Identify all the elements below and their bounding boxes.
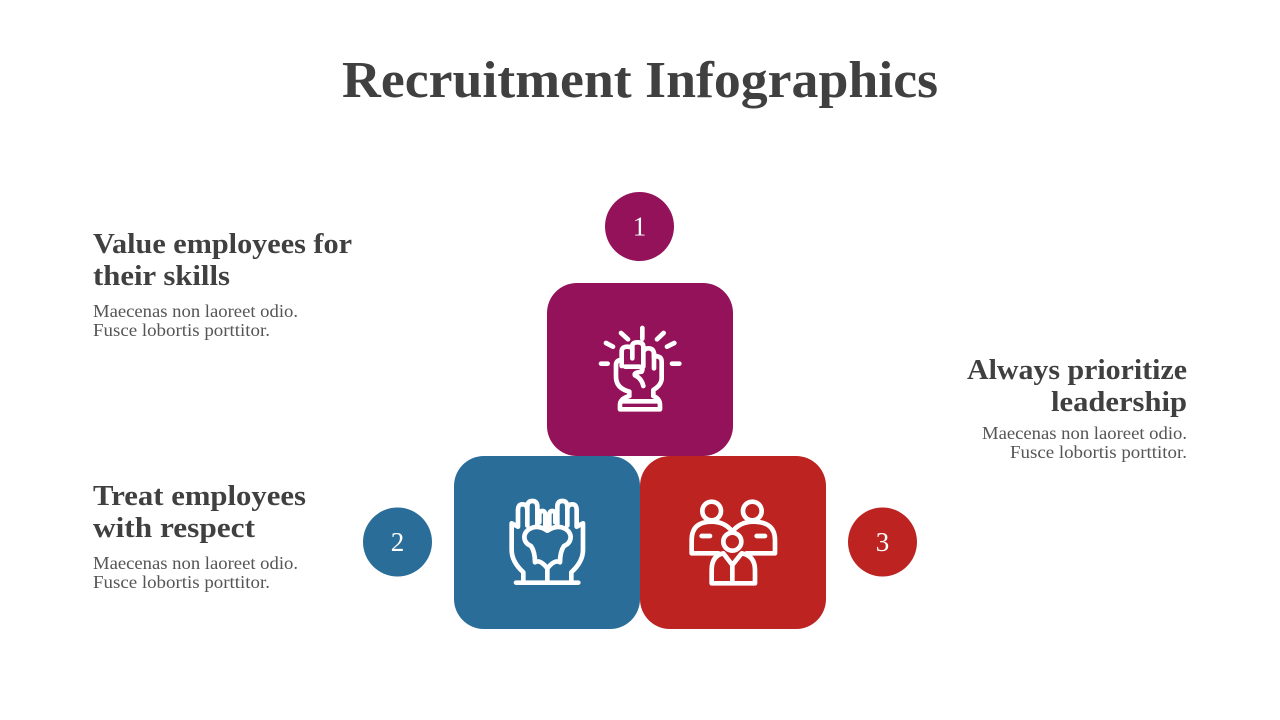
badge: number 2 [363,508,432,576]
text block: value employees: Maecenas non laoreet odio. [93,301,298,321]
panel: purple block [547,283,733,456]
icon: raised fist [601,328,679,409]
badge: number 3 [848,508,917,576]
text block: always prioritize leadership: Fusce lobortis porttitor. [1010,442,1187,462]
text block: treat employees: Fusce lobortis porttitor. [93,572,270,592]
text block: value employees: their skills [93,261,230,292]
text block: value employees: Fusce lobortis porttitor. [93,320,270,340]
text block: always prioritize leadership: leadership [1051,387,1187,418]
text block: value employees: Value employees for [93,229,352,260]
text block: always prioritize leadership: Maecenas non laoreet odio. [982,423,1187,443]
icon: hands holding heart [512,501,583,583]
badge: number 1 [605,192,674,261]
text block: treat employees [93,481,306,592]
title: Recruitment Infographics [342,52,938,109]
badge: number 1: 1 [633,212,646,242]
badge: number 2: 2 [391,527,404,557]
text block: treat employees: Treat employees [93,481,306,512]
text block: treat employees: with respect [93,513,256,544]
panel: blue block [454,456,640,629]
icon: three people [692,502,775,583]
panel: red block [640,456,826,629]
text block: value employees [93,229,352,340]
text block: treat employees: Maecenas non laoreet odio. [93,553,298,573]
text block: always prioritize leadership [967,355,1187,462]
text block: always prioritize leadership: Always prioritize [967,355,1187,386]
badge: number 3: 3 [876,527,889,557]
